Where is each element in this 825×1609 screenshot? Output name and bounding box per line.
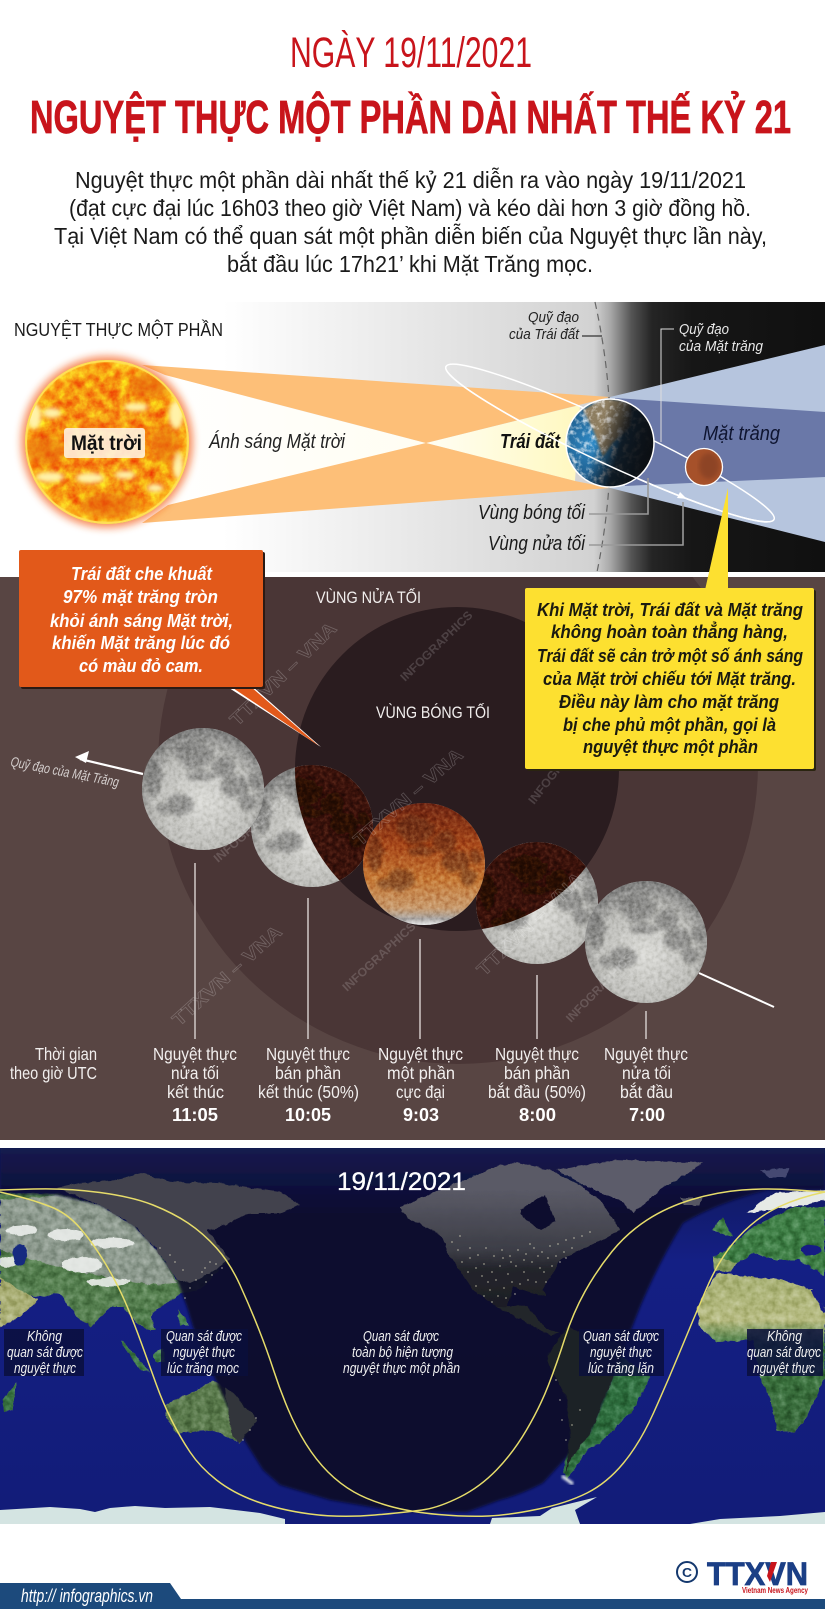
moon phase: 50% partial end <box>251 765 373 887</box>
city lights <box>160 1232 590 1440</box>
label: penumbra <box>488 502 683 555</box>
phase label: 7:00: nửa tối <box>622 1063 671 1083</box>
phase label: 9:03: Nguyệt thực <box>378 1044 463 1064</box>
label: earth orbit <box>509 309 602 343</box>
phase label: 11:05: nửa tối <box>171 1063 219 1083</box>
map label: no visibility west: quan sát được <box>7 1345 84 1361</box>
callout: orange: Trái đất che khuất <box>71 563 213 584</box>
phase label: 8:00: Nguyệt thực <box>495 1044 579 1064</box>
phase label: 11:05 <box>153 1044 237 1125</box>
phase label: 10:05: Nguyệt thực <box>266 1044 350 1064</box>
moon orbit front with arrow <box>437 367 774 539</box>
map label: no visibility east <box>747 1329 823 1377</box>
label: sunlight: Ánh sáng Mặt trời <box>208 430 345 453</box>
map label: moonrise: Quan sát được <box>166 1329 243 1345</box>
watermarks: INFOGRAPHICS <box>397 608 475 684</box>
logo: TTXVN: Vietnam News Agency <box>742 1586 808 1595</box>
intro paragraph <box>54 167 767 277</box>
label: earth: Trái đất <box>500 431 561 453</box>
map label: moonset: nguyệt thực <box>590 1345 653 1361</box>
watermarks: TTXVN – VNA <box>473 868 587 980</box>
label: moon: Mặt trăng <box>703 423 780 445</box>
penumbra disc <box>158 577 758 1064</box>
map label: full visibility <box>343 1329 460 1377</box>
map label: no visibility east: Không <box>767 1329 802 1345</box>
callout: orange: khỏi ánh sáng Mặt trời, <box>50 610 233 631</box>
watermarks: INFOGRAPHICS <box>525 723 595 807</box>
phase label: 8:00: 8:00 <box>519 1105 556 1125</box>
icon: sun <box>21 356 193 528</box>
map label: no visibility west: Không <box>27 1329 62 1345</box>
antarctica ice <box>0 1497 825 1524</box>
phase label: 10:05: 10:05 <box>285 1105 331 1125</box>
phase label: 7:00: Nguyệt thực <box>604 1044 688 1064</box>
visibility boundary curves <box>0 1189 825 1516</box>
watermarks: TTXVN – VNA <box>168 921 286 1030</box>
phase label: 10:05: bán phần <box>275 1063 341 1083</box>
callout: orange <box>19 550 321 747</box>
moon phase: 50% partial begin <box>476 842 598 964</box>
moon phase: penumbral end <box>142 728 264 850</box>
label: moon orbit: Quỹ đạo của Mặt Trăng <box>9 753 121 790</box>
label: moon orbit <box>661 321 764 442</box>
label: penumbra: Vùng nửa tối <box>488 533 585 555</box>
callout: yellow: Khi Mặt trời, Trái đất và Mặt trăng <box>537 599 803 620</box>
callout: yellow: không hoàn toàn thẳng hàng, <box>551 621 788 642</box>
icon: small moon <box>686 448 722 486</box>
map label: moonset: Quan sát được <box>583 1329 660 1345</box>
watermarks: INFOGRAPHICS <box>563 951 636 1025</box>
label: UTC time heading <box>10 1044 97 1083</box>
phase label: 9:03: cực đại <box>396 1082 445 1102</box>
intro paragraph: (đạt cực đại lúc 16h03 theo giờ Việt Nam) và kéo dài hơn 3 giờ đồng hồ. <box>69 195 751 221</box>
watermarks: TTXVN – VNA <box>350 744 467 850</box>
night lands <box>57 1160 790 1475</box>
phase label: 10:05 <box>258 1044 359 1125</box>
phase label: 8:00: bán phần <box>504 1063 570 1083</box>
intro paragraph: Nguyệt thực một phần dài nhất thế kỷ 21 diễn ra vào ngày 19/11/2021 <box>75 167 746 193</box>
watermarks: TTXVN – VNA <box>226 618 340 730</box>
footer bar with url tab <box>0 1583 825 1609</box>
moon phase: penumbral begin <box>585 881 707 1003</box>
callout: orange: khiến Mặt trăng lúc đó <box>52 632 230 653</box>
phase label: 8:00: bắt đầu (50%) <box>488 1081 586 1102</box>
moon orbit back <box>437 347 783 539</box>
phase label: 11:05: 11:05 <box>172 1105 218 1125</box>
phase label: 10:05: kết thúc (50%) <box>258 1082 359 1102</box>
label: moon orbit: Quỹ đạo <box>679 321 729 338</box>
phase label: 9:03: 9:03 <box>403 1105 439 1125</box>
phase label: 9:03: một phần <box>387 1063 455 1083</box>
time marker lines <box>195 863 646 1039</box>
phase label: 11:05: Nguyệt thực <box>153 1044 237 1064</box>
label: umbra zone: VÙNG BÓNG TỐI <box>376 702 490 722</box>
map label: full visibility: nguyệt thực một phần <box>343 1361 460 1377</box>
intro paragraph: bắt đầu lúc 17h21’ khi Mặt Trăng mọc. <box>227 251 593 277</box>
shadow cones: umbra <box>615 398 825 486</box>
sunlight beams <box>142 365 610 523</box>
sun label <box>64 428 145 458</box>
callout: orange: 97% mặt trăng tròn <box>63 586 218 607</box>
map label: moonrise: lúc trăng mọc <box>167 1361 240 1377</box>
map label: moonset: lúc trăng lặn <box>588 1361 654 1377</box>
panel: eclipse phases <box>0 577 825 1140</box>
phase label: 7:00 <box>604 1044 688 1125</box>
logo: TTXVN <box>677 1556 808 1595</box>
map label: no visibility west: nguyệt thực <box>14 1361 77 1377</box>
callout: yellow: của Mặt trời chiếu tới Mặt trăng. <box>543 668 796 689</box>
label: moon orbit: của Mặt trăng <box>679 338 764 355</box>
shadow cones: penumbra <box>610 345 825 542</box>
callout: orange: có màu đỏ cam. <box>79 655 203 676</box>
callout: yellow: Điều này làm cho mặt trăng <box>559 691 779 712</box>
umbra disc <box>295 607 619 931</box>
phase label: 11:05: kết thúc <box>167 1082 224 1102</box>
map label: moonrise: nguyệt thực <box>173 1345 236 1361</box>
map label: moonrise <box>161 1329 248 1377</box>
logo: TTXVN: C <box>682 1565 693 1580</box>
label: umbra: Vùng bóng tối <box>478 502 585 524</box>
heading: partial eclipse: NGUYỆT THỰC MỘT PHẦN <box>14 319 223 340</box>
moon orbit arrow <box>75 751 774 1007</box>
panel: visibility world map <box>0 1148 825 1524</box>
earth orbit dashed arc <box>595 302 611 572</box>
panel: eclipse geometry diagram <box>0 302 825 572</box>
icon: sun: Mặt trời <box>71 432 142 455</box>
watermarks: INFOGRAPHICS <box>339 919 419 994</box>
day lands <box>0 1190 825 1480</box>
map date heading: 19/11/2021 <box>337 1168 466 1196</box>
label: earth orbit: của Trái đất <box>509 326 580 343</box>
watermarks: INFOGRAPHICS <box>211 792 292 865</box>
callout: yellow <box>525 488 816 771</box>
phase label: 8:00 <box>488 1044 586 1125</box>
logo: TTXVN: TTXVN <box>707 1556 808 1592</box>
map label: moonset <box>579 1329 664 1377</box>
night side overlay <box>0 1148 825 1512</box>
map label: full visibility: toàn bộ hiện tượng <box>352 1345 453 1361</box>
footer bar with url tab: http:// infographics.vn <box>21 1586 153 1606</box>
moon phase: maximum <box>363 803 485 925</box>
watermarks <box>168 608 636 1030</box>
callout: yellow: nguyệt thực một phần <box>583 736 758 757</box>
phase label: 9:03 <box>378 1044 463 1125</box>
map label: full visibility: Quan sát được <box>363 1329 440 1345</box>
title: date: NGÀY 19/11/2021 <box>290 29 532 77</box>
intro paragraph: Tại Việt Nam có thể quan sát một phần diễn biến của Nguyệt thực lần này, <box>54 223 767 249</box>
label: earth orbit: Quỹ đạo <box>528 309 579 326</box>
phase label: 7:00: 7:00 <box>629 1105 665 1125</box>
icon: earth <box>566 398 654 487</box>
map label: no visibility west <box>4 1329 84 1377</box>
phase label: 7:00: bắt đầu <box>620 1081 673 1102</box>
label: UTC time heading: theo giờ UTC <box>10 1063 97 1083</box>
label: UTC time heading: Thời gian <box>35 1044 97 1064</box>
label: penumbra zone: VÙNG NỬA TỐI <box>316 587 421 607</box>
callout: yellow: bị che phủ một phần, gọi là <box>563 714 776 735</box>
label: umbra <box>478 478 648 524</box>
